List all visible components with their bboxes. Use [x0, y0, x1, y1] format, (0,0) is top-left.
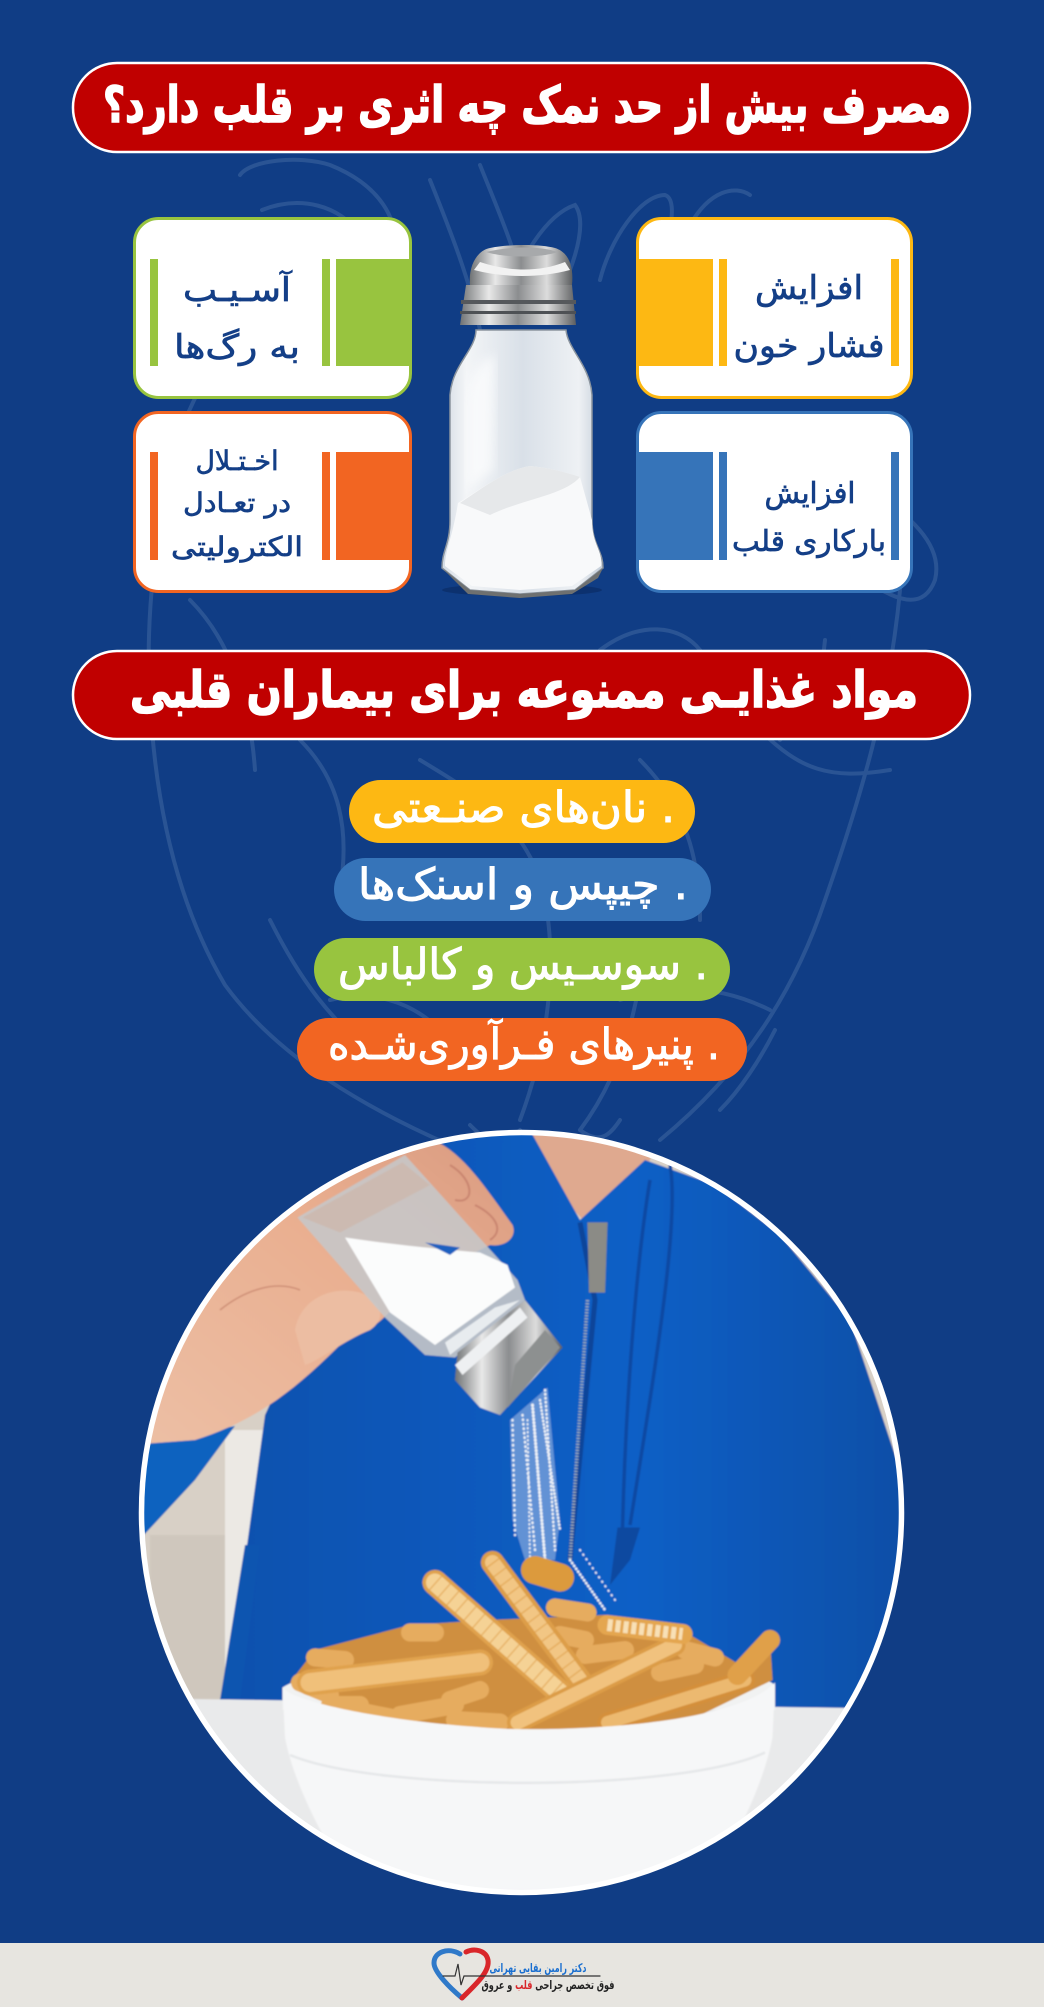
logo: doctor name: دکتر رامین بقایی تهرانی [490, 1961, 586, 1975]
photo circle frame [142, 1132, 902, 1892]
list item pill: chips [334, 858, 711, 921]
panel: افزایش فشار خون [638, 218, 912, 398]
icon: salt shaker [442, 245, 603, 598]
hand [130, 1135, 514, 1445]
panel: اختلال در تعادل الکترولیتی: الکترولیتی [171, 532, 303, 563]
hoodie [220, 1130, 910, 1720]
left sleeve [144, 1425, 236, 1535]
panel: افزایش فشار خون: فشار خون [734, 326, 884, 365]
table [194, 1698, 845, 1832]
heart watermark illustration [149, 160, 936, 1145]
falling salt [510, 1388, 560, 1560]
list item pill: breads: . نان‌های صنـعتی [372, 783, 675, 833]
fries mass [290, 1615, 772, 1732]
list item pill: sausages: . سوسـیس و کالباس [338, 940, 708, 990]
panel: افزایش بارکاری قلب [638, 412, 912, 592]
panel: افزایش بارکاری قلب: بارکاری قلب [732, 524, 886, 558]
list item pill: chips: . چیپس و اسنک‌ها [358, 860, 688, 910]
panel: آسیب به رگ‌ها [134, 218, 410, 398]
panel: اختلال در تعادل الکترولیتی: در تعـادل [183, 488, 291, 519]
logo: heart [434, 1950, 600, 1998]
footer bar [0, 1943, 1044, 2007]
list item pill: breads [349, 780, 695, 843]
list item pill: cheese: . پنیرهای فـرآوری‌شـده [328, 1018, 720, 1070]
pouring shaker [298, 1155, 562, 1415]
logo: specialty: فوق تخصص جراحی قلب و عروق [481, 1978, 614, 1993]
bowl [282, 1682, 775, 1890]
photo: salt poured on fries [144, 1135, 899, 1890]
panel: افزایش فشار خون: افزایش [755, 268, 863, 307]
panel: اختلال در تعادل الکترولیتی: اخـتـلال [196, 446, 278, 477]
panel: آسیب به رگ‌ها: به رگ‌ها [174, 327, 300, 366]
bowl back rim [281, 1680, 776, 1708]
fries [300, 1562, 770, 1722]
title banner [73, 63, 970, 152]
panel: آسیب به رگ‌ها: آسـیـب [183, 270, 293, 309]
section banner [73, 651, 970, 739]
panel: اختلال در تعادل الکترولیتی [134, 412, 410, 592]
panel: افزایش بارکاری قلب: افزایش [764, 476, 856, 510]
neck [532, 1136, 651, 1219]
